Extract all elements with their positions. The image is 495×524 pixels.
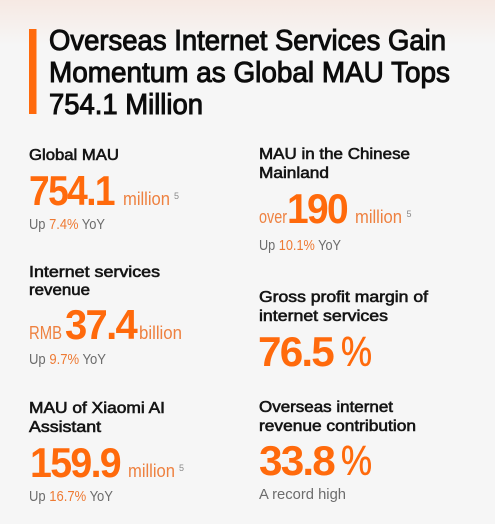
panel: Global MAU: Global MAU — [29, 147, 119, 164]
panel: Overseas internet revenue contribution: A record high — [259, 487, 346, 503]
panel: Internet services revenue: Internet services — [29, 264, 160, 281]
title accent bar — [29, 29, 36, 114]
panel: MAU of Xiaomi AI Assistant: Up 16.7% YoY — [29, 489, 113, 505]
panel: Overseas internet revenue contribution: Overseas internet — [259, 399, 394, 416]
panel: MAU in the Chinese Mainland: Mainland — [259, 165, 329, 182]
panel: Global MAU: 5 — [174, 191, 179, 201]
panel: Overseas internet revenue contribution: % — [341, 437, 372, 484]
panel: Global MAU: million — [123, 189, 170, 209]
panel: MAU of Xiaomi AI Assistant: 5 — [179, 463, 184, 473]
panel: MAU in the Chinese Mainland: 190 — [287, 185, 347, 232]
panel: Overseas internet revenue contribution: revenue contribution — [259, 418, 416, 435]
panel: Gross profit margin: 76.5 — [258, 328, 334, 375]
panel: Global MAU — [29, 147, 179, 233]
panel: Gross profit margin: internet services — [259, 308, 388, 325]
panel: MAU of Xiaomi AI Assistant: million — [128, 461, 175, 481]
panel: MAU in the Chinese Mainland: Up 10.1% YoY — [259, 238, 341, 254]
panel: MAU of Xiaomi AI Assistant: Assistant — [29, 419, 102, 436]
panel: Internet services revenue — [29, 264, 182, 368]
panel: MAU of Xiaomi AI Assistant: 159.9 — [30, 439, 120, 486]
title: 754.1 Million — [49, 89, 203, 121]
panel: Overseas internet revenue contribution: 33.8 — [259, 437, 335, 484]
panel: Gross profit margin: Gross profit margin of — [259, 289, 429, 306]
panel: MAU in the Chinese Mainland: over — [259, 207, 287, 227]
panel: MAU in the Chinese Mainland — [259, 146, 412, 254]
panel: Overseas internet revenue contribution — [259, 399, 416, 503]
panel: MAU of Xiaomi AI Assistant — [29, 400, 184, 505]
panel: Global MAU: 754.1 — [29, 167, 115, 214]
panel: Internet services revenue: Up 9.7% YoY — [29, 352, 106, 368]
panel: MAU in the Chinese Mainland: million — [355, 207, 402, 227]
panel: Internet services revenue: revenue — [29, 282, 90, 299]
panel: Internet services revenue: 37.4 — [65, 301, 138, 348]
title: Momentum as Global MAU Tops — [49, 57, 450, 89]
panel: MAU in the Chinese Mainland: MAU in the Chinese — [259, 146, 410, 163]
panel: Gross profit margin: % — [341, 328, 372, 375]
title — [49, 25, 450, 121]
panel: MAU in the Chinese Mainland: 5 — [406, 209, 412, 219]
title: Overseas Internet Services Gain — [49, 25, 446, 57]
panel: Gross profit margin — [258, 289, 429, 375]
panel: Internet services revenue: billion — [139, 323, 182, 343]
panel: Global MAU: Up 7.4% YoY — [29, 217, 105, 233]
panel: MAU of Xiaomi AI Assistant: MAU of Xiaomi AI — [29, 400, 165, 417]
panel: Internet services revenue: RMB — [29, 323, 62, 343]
